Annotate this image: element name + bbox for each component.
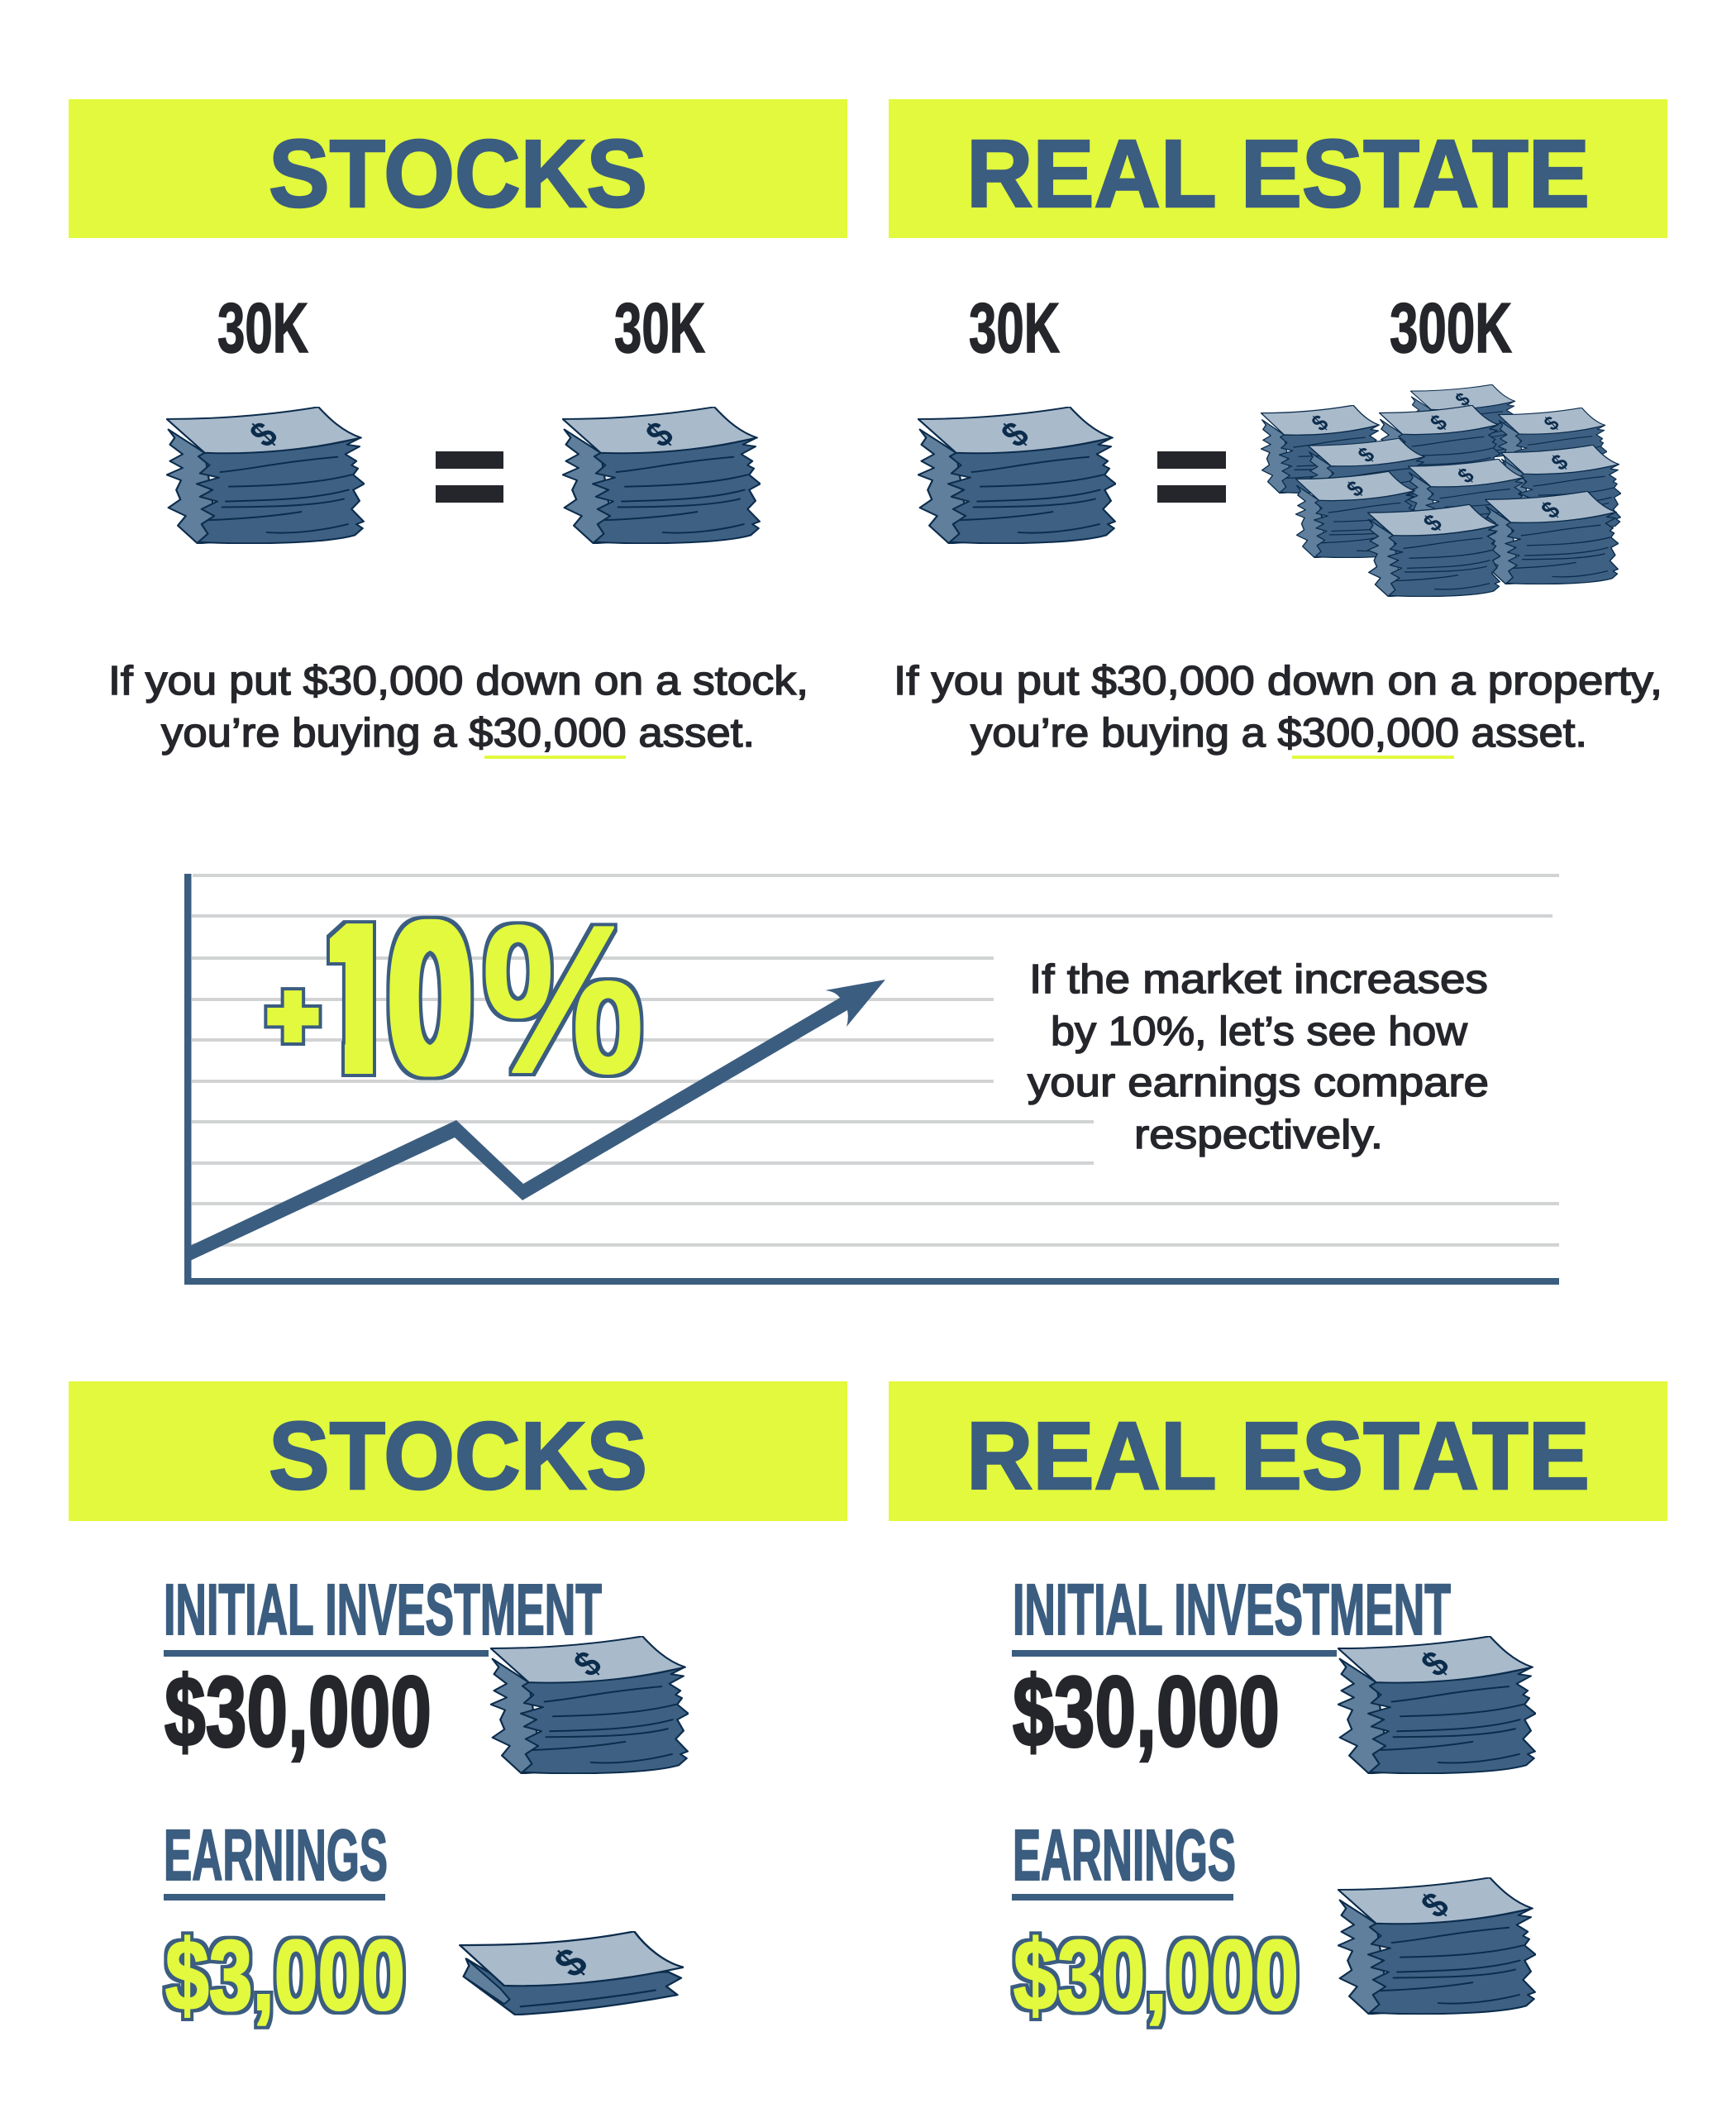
panel: stocks results heading [69, 1381, 847, 1521]
panel: real estate results heading [889, 1381, 1667, 1521]
text: stocks explanation [108, 659, 808, 759]
text: market explanation: by 10%, let’s see how [1051, 1009, 1468, 1054]
panel: stocks heading [69, 99, 847, 238]
text: real estate explanation [894, 659, 1662, 759]
panel: stocks results: INITIAL INVESTMENT [164, 1570, 602, 1650]
panel: real estate results: $30,000 [1013, 1655, 1280, 1767]
panel: stocks results: EARNINGS [164, 1815, 388, 1896]
panel: stocks results: $3,000 [165, 1919, 405, 2031]
callout: plus ten percent: % [482, 881, 644, 1118]
callout: plus ten percent: 1 [315, 884, 398, 1114]
callout: plus ten percent: + [268, 968, 318, 1064]
panel: real estate results heading: REAL ESTATE [966, 1402, 1590, 1509]
panel: real estate comparison: 30K [969, 289, 1060, 368]
panel: stocks comparison: 30K [217, 289, 308, 368]
icon: money stack [1338, 1636, 1536, 1773]
text: real estate explanation: If you put $30,000 down on a property, [894, 659, 1662, 703]
callout: plus ten percent: 0 [388, 880, 473, 1116]
panel: stocks results: $30,000 [165, 1655, 432, 1767]
panel: stocks results heading: STOCKS [269, 1402, 647, 1509]
panel: real estate comparison: 300K [1390, 289, 1512, 368]
text: market explanation: respectively. [1134, 1113, 1383, 1157]
icon: ten money stacks [1261, 384, 1621, 597]
text: stocks explanation: If you put $30,000 down on a stock, [108, 659, 808, 703]
text: real estate explanation: you’re buying a $300,000 asset. [971, 711, 1587, 756]
icon: money stack right [563, 407, 761, 543]
icon: equals sign [1157, 451, 1226, 503]
icon: thin money stack [460, 1931, 684, 2015]
panel: real estate heading: REAL ESTATE [966, 120, 1590, 227]
icon: money stack [1338, 1877, 1536, 2014]
icon: money stack left [167, 407, 365, 543]
panel: real estate results [1012, 1570, 1536, 2031]
panel: real estate results: EARNINGS [1013, 1815, 1236, 1896]
axes [184, 874, 1559, 1285]
icon: equals sign [436, 451, 503, 503]
panel: stocks comparison [167, 289, 761, 543]
panel: stocks heading: STOCKS [269, 120, 647, 227]
panel: real estate heading [889, 99, 1667, 238]
icon: money stack [491, 1636, 689, 1773]
text: stocks explanation: you’re buying a $30,000 asset. [161, 711, 755, 756]
panel: stocks results [164, 1570, 689, 2031]
arrow: rising trend line [188, 980, 885, 1261]
text: market explanation: your earnings compare [1028, 1061, 1489, 1105]
chart: market growth line chart [184, 874, 1559, 1285]
icon: single money stack [918, 407, 1116, 543]
panel: real estate comparison [918, 289, 1621, 597]
panel: real estate results: INITIAL INVESTMENT [1013, 1570, 1451, 1650]
callout: plus ten percent [264, 916, 643, 1080]
text: market explanation [1028, 957, 1489, 1157]
panel: real estate results: $30,000 [1013, 1919, 1299, 2031]
panel: stocks comparison: 30K [614, 289, 705, 368]
text: market explanation: If the market increases [1029, 957, 1488, 1002]
